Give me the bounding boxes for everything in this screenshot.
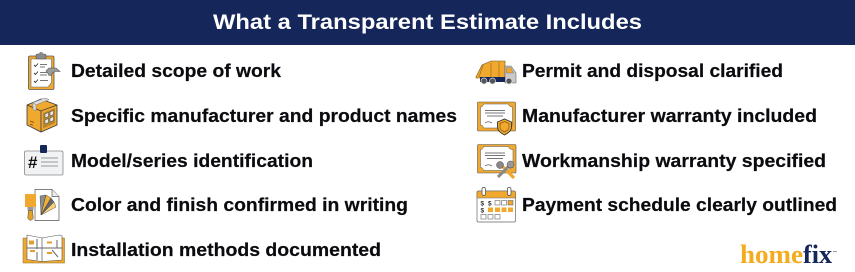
text: permit and disposal: Permit and disposal clarified <box>522 60 783 81</box>
text: installation methods: Installation methods documented <box>71 239 381 260</box>
icon: certificate with shield <box>478 102 516 135</box>
icon: payment calendar: $ <box>488 200 492 208</box>
icon: dump truck <box>476 61 516 84</box>
icon: instruction book <box>23 235 64 263</box>
text: specific manufacturer and product names: Specific manufacturer and product names <box>71 105 457 126</box>
text: workmanship warranty: Workmanship warranty specified <box>522 150 826 171</box>
logo: homefix: home <box>740 240 803 269</box>
logo: homefix <box>740 240 837 269</box>
text: detailed scope of work: Detailed scope of work <box>71 60 282 81</box>
text: manufacturer warranty: Manufacturer warranty included <box>522 105 817 126</box>
icon: color swatch and brush <box>25 190 59 220</box>
icon: id badge: # <box>28 153 38 172</box>
icon: payment calendar: $ <box>480 208 484 214</box>
icon: id badge <box>24 145 63 175</box>
icon: product box <box>27 98 57 132</box>
logo: homefix: fix <box>803 240 832 269</box>
icon: payment calendar <box>477 188 516 222</box>
title banner <box>0 0 855 45</box>
text: payment schedule: Payment schedule clearly outlined <box>522 194 837 215</box>
icon: clipboard <box>28 52 60 90</box>
text: color and finish: Color and finish confirmed in writing <box>71 194 408 215</box>
icon: payment calendar: $ <box>480 200 484 208</box>
title banner: What a Transparent Estimate Includes <box>213 10 642 34</box>
icon: certificate with tools <box>478 144 516 178</box>
text: model/series identification: Model/series identification <box>71 150 313 171</box>
